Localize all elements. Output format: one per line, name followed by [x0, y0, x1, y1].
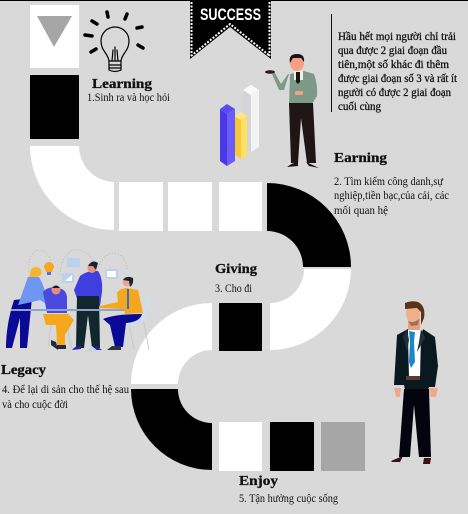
text: intro paragraph: được giai đoạn số 3 và rất ít — [338, 71, 458, 85]
text: intro paragraph: tiên,một số khác đi thêm — [338, 57, 450, 71]
text: legacy description: và cho cuộc đời — [2, 399, 68, 411]
heading: Learning: Learning — [92, 76, 152, 91]
text: legacy description: 4. Để lại di sản cho thế hệ sau — [2, 383, 129, 396]
text: intro paragraph — [338, 29, 458, 113]
text: earning description: mối quan hệ — [334, 204, 388, 217]
text: earning description: 2. Tìm kiếm công danh,sự — [334, 175, 444, 188]
white tile row — [119, 182, 262, 231]
start tile with triangle — [30, 5, 79, 68]
success banner — [190, 0, 271, 59]
icon: light bulb — [85, 12, 143, 72]
heading: Giving: Giving — [215, 261, 257, 276]
heading: Enjoy: Enjoy — [239, 473, 278, 488]
success banner: SUCCESS — [200, 5, 261, 24]
winding path board — [30, 5, 365, 471]
final tiles — [219, 422, 365, 471]
text: legacy description — [2, 383, 129, 411]
black curve — [267, 183, 351, 267]
white curve 3 — [131, 303, 212, 384]
text: earning description: nghiệp,tiền bạc,của cải, các — [334, 189, 449, 202]
white curve 2 — [270, 269, 351, 350]
icon: bar chart — [220, 85, 259, 166]
text: intro paragraph: Hầu hết mọi người chỉ trải — [338, 29, 457, 43]
black middle tile — [219, 303, 262, 351]
text: intro paragraph: người có được 2 giai đoạn — [338, 85, 451, 99]
text: learning description: 1.Sinh ra và học hỏi — [87, 92, 170, 104]
illustration: presenter — [265, 54, 319, 168]
heading: Earning: Earning — [334, 150, 387, 165]
black curve 2 — [131, 389, 212, 470]
illustration: man in suit — [391, 301, 438, 464]
text: enjoy description: 5. Tận hưởng cuộc sống — [239, 492, 338, 505]
divider line — [331, 14, 332, 112]
text: intro paragraph: qua được 2 giai đoạn đầu — [338, 43, 447, 57]
white curve 1 — [30, 146, 114, 230]
text: intro paragraph: cuối cùng — [338, 99, 381, 113]
text: earning description — [334, 175, 449, 217]
heading: Legacy: Legacy — [1, 362, 46, 377]
illustration: team meeting — [6, 250, 151, 352]
text: giving description: 3. Cho đi — [215, 283, 252, 295]
black tile — [30, 75, 79, 139]
